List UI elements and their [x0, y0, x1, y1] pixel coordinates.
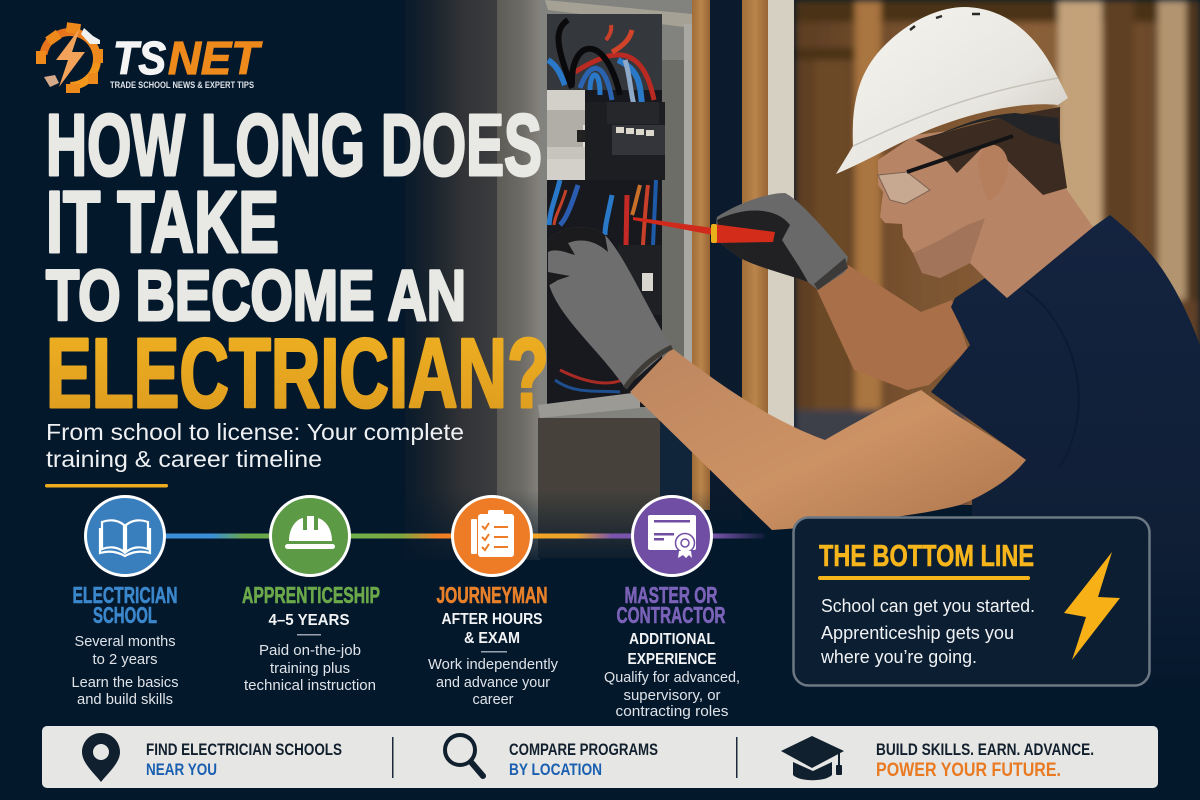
step 3: journeyman: & EXAM [464, 630, 520, 647]
icon: gear with bolt [36, 22, 103, 93]
action: build skills: POWER YOUR FUTURE. [876, 760, 1061, 781]
neck and face [878, 120, 1093, 298]
bottom action bar [42, 726, 1158, 788]
ear [978, 145, 1008, 200]
sill and lower cabinet [538, 392, 640, 418]
action: find schools: FIND ELECTRICIAN SCHOOLS [146, 740, 342, 759]
icon: book [86, 496, 164, 576]
helmet strap [930, 113, 1060, 145]
helmet [836, 7, 1068, 174]
title: IT TAKE [46, 174, 279, 271]
callout text: where you’re going. [820, 647, 977, 667]
step 1: electrician school: ELECTRICIAN [72, 582, 178, 608]
logo [36, 22, 263, 93]
tagline: TRADE SCHOOL NEWS & EXPERT TIPS [110, 80, 254, 91]
metal cabinet frame [497, 0, 540, 560]
step 4: master or contractor: EXPERIENCE [628, 651, 717, 668]
step 2: apprenticeship: APPRENTICESHIP [242, 582, 380, 608]
step 2: apprenticeship: technical instruction [244, 678, 376, 694]
callout text [820, 596, 1035, 667]
subtitle [46, 419, 464, 472]
breakers [547, 90, 665, 315]
step 1: electrician school [72, 496, 178, 708]
action: build skills [876, 740, 1094, 781]
bottom darkening gradient [380, 490, 800, 570]
safety glasses [878, 136, 1013, 204]
action: build skills: BUILD SKILLS. EARN. ADVANCE. [876, 740, 1094, 759]
action: find schools [146, 740, 342, 779]
step 4: master or contractor: CONTRACTOR [616, 602, 726, 628]
title: TO BECOME AN [46, 257, 466, 336]
blurred wood framing backdrop [795, 0, 1200, 520]
step 3: journeyman: JOURNEYMAN [436, 582, 548, 608]
step 3: journeyman: AFTER HOURS [442, 611, 543, 628]
studs and white trim [742, 0, 768, 430]
rear arm [817, 265, 968, 390]
title: ELECTRICIAN? [46, 318, 549, 428]
step 2: apprenticeship: 4–5 YEARS [268, 612, 350, 629]
left darkening gradient [0, 0, 460, 800]
screwdriver [633, 217, 775, 243]
icon: clipboard checklist [452, 496, 532, 576]
icon: graduation cap [781, 736, 844, 780]
subtitle: training & career timeline [46, 446, 322, 472]
title: HOW LONG DOES [46, 97, 542, 194]
step 1: electrician school: to 2 years [92, 652, 158, 668]
action: find schools: NEAR YOU [146, 760, 217, 779]
step 3: journeyman: career [472, 692, 514, 708]
timeline connector [165, 534, 764, 538]
action: compare programs: COMPARE PROGRAMS [509, 740, 658, 759]
step 4: master or contractor: MASTER OR [624, 582, 718, 608]
wires [548, 20, 656, 392]
icon: lightning bolt [1064, 552, 1120, 660]
icon: map pin [82, 733, 120, 782]
icon: certificate [632, 496, 712, 576]
callout text: Apprenticeship gets you [821, 623, 1014, 643]
title [46, 97, 549, 428]
concrete column [405, 0, 497, 560]
step 1: electrician school: Learn the basics [72, 675, 178, 691]
step 2: apprenticeship [242, 496, 380, 694]
wordmark: TS [113, 32, 166, 84]
step 4: master or contractor: supervisory, or [624, 688, 721, 704]
action: compare programs [509, 740, 658, 779]
icon: magnifier [445, 735, 483, 776]
step 3: journeyman [428, 496, 559, 708]
step 4: master or contractor: Qualify for advanced, [604, 670, 740, 686]
step 1: electrician school: and build skills [77, 692, 173, 708]
step 1: electrician school: Several months [74, 634, 176, 650]
callout: the bottom line [794, 518, 1150, 686]
right glove [716, 193, 848, 290]
left glove [548, 227, 672, 388]
step 1: electrician school: SCHOOL [93, 602, 157, 628]
step 3: journeyman: and advance your [436, 675, 550, 691]
step 4: master or contractor: contracting roles [616, 704, 728, 720]
step 2: apprenticeship: training plus [270, 661, 350, 677]
shirt [931, 215, 1200, 800]
step 4: master or contractor [604, 496, 740, 720]
action: compare programs: BY LOCATION [509, 760, 602, 779]
callout heading: THE BOTTOM LINE [819, 538, 1034, 573]
panel interior [547, 14, 662, 407]
callout text: School can get you started. [821, 596, 1035, 616]
logo: NET [168, 32, 263, 84]
step 4: master or contractor: ADDITIONAL [629, 631, 715, 648]
front arm [630, 348, 1026, 530]
step 2: apprenticeship: Paid on-the-job [259, 643, 361, 659]
subtitle: From school to license: Your complete [46, 419, 464, 445]
step 3: journeyman: Work independently [428, 657, 559, 673]
hair [915, 107, 1067, 195]
icon: hard hat [270, 496, 350, 576]
